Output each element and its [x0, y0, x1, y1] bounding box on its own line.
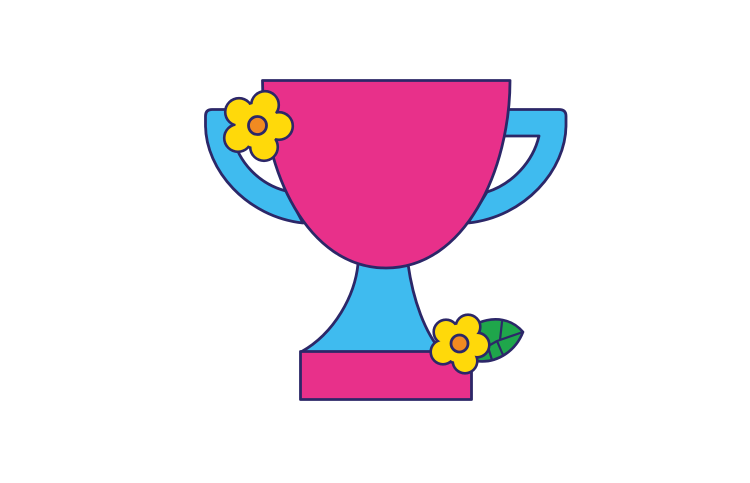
flower centre — [451, 335, 468, 352]
stem — [301, 264, 442, 352]
petal outlines — [226, 92, 292, 160]
base — [300, 352, 472, 400]
trophy — [206, 80, 566, 400]
flower centre — [248, 116, 266, 134]
cup — [262, 80, 510, 268]
flower: upper left — [226, 92, 292, 160]
petals — [432, 316, 488, 372]
petal outlines — [432, 316, 488, 372]
leaf — [476, 319, 523, 361]
flower: lower right — [432, 316, 488, 372]
right handle — [468, 110, 566, 223]
petals — [226, 92, 292, 160]
left handle — [206, 110, 303, 223]
